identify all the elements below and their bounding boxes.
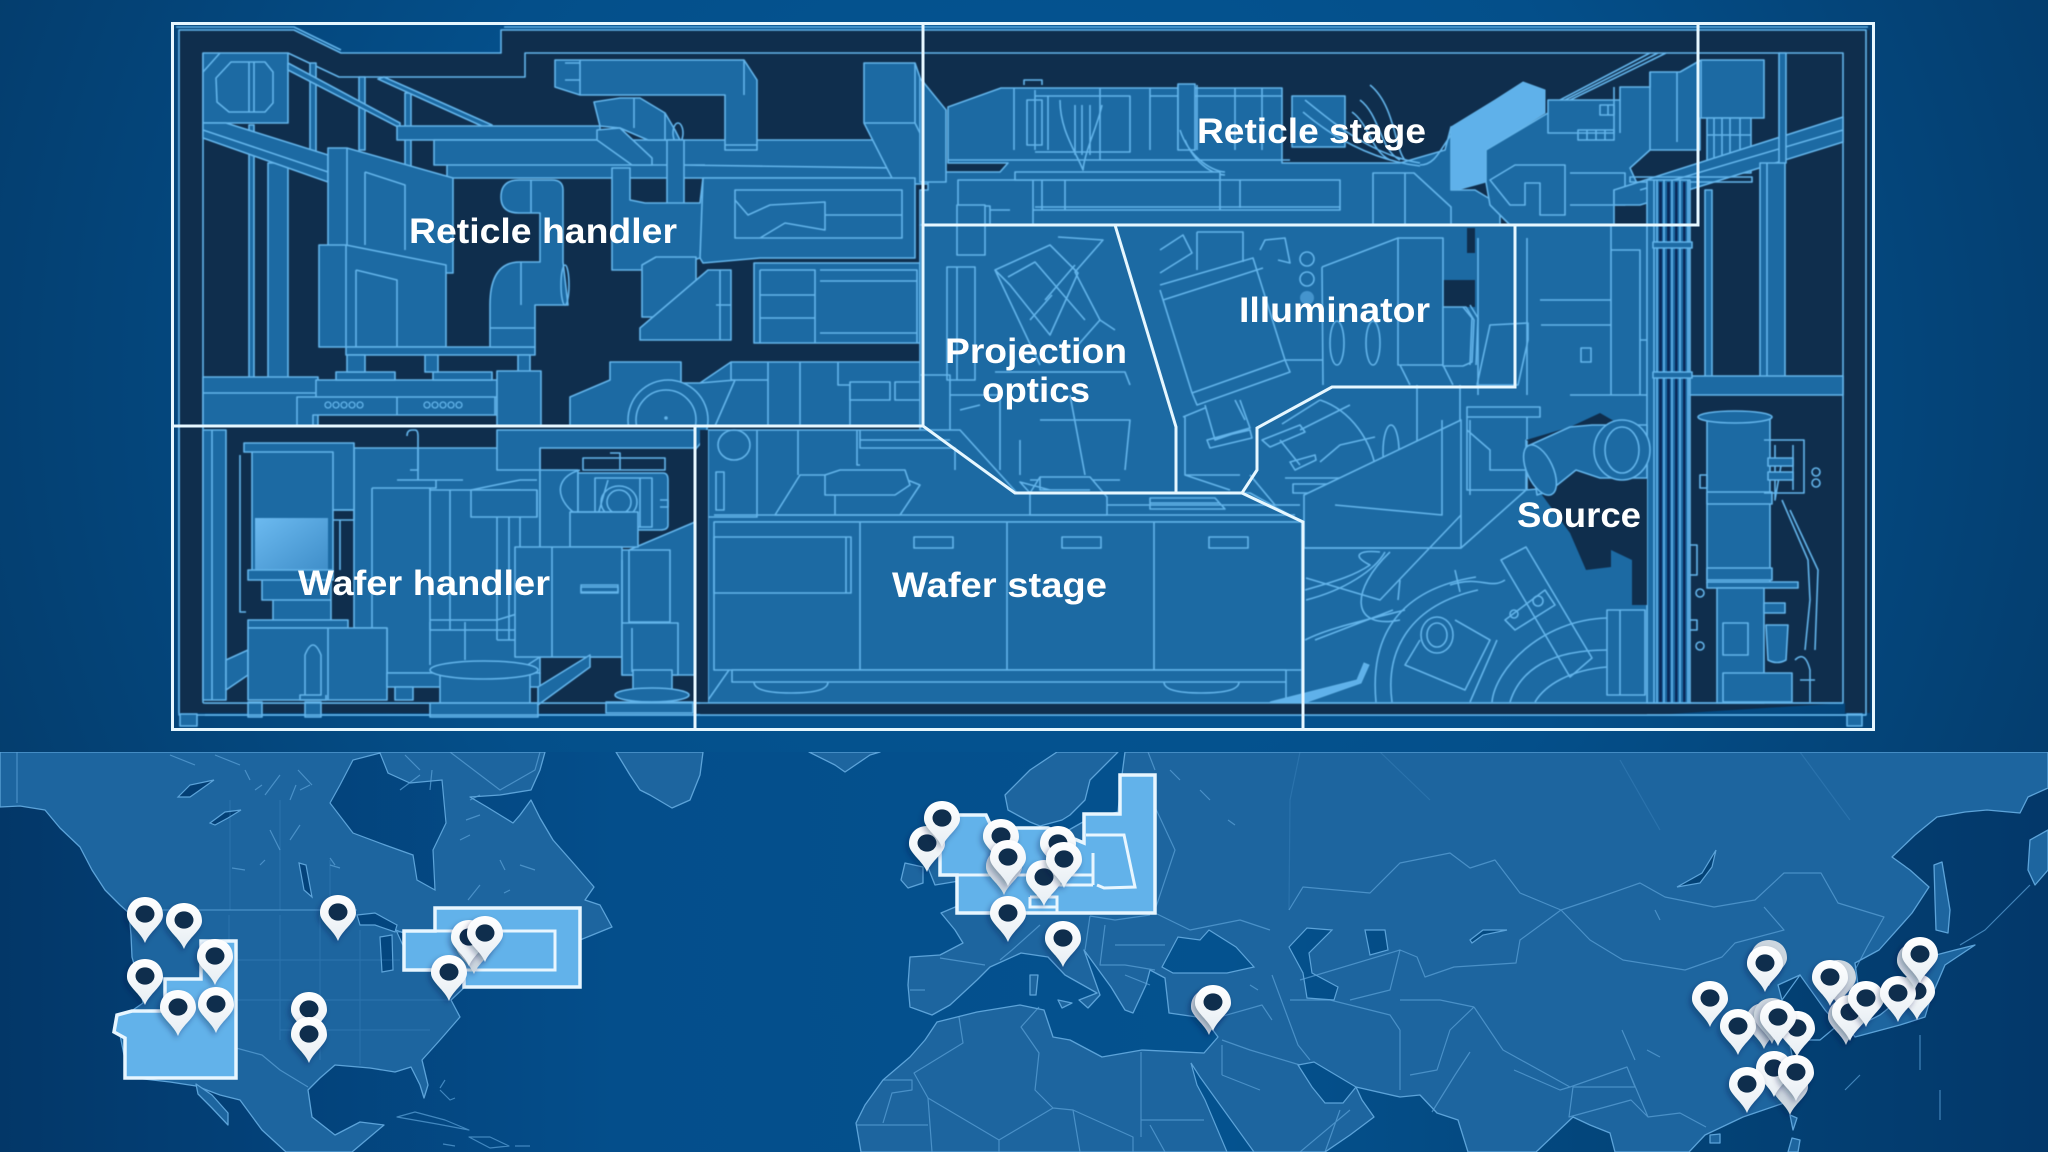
source vessel arcs [1375,577,1607,702]
pin [1751,940,1787,986]
lower stage slab [958,180,1340,225]
Caribbean islands [397,1080,530,1148]
pin [1754,998,1790,1044]
land: Greenland and Iceland [616,752,880,808]
light-blue reticle arm [1451,82,1545,190]
pin [198,987,234,1033]
label: Illuminator: Illuminator [1239,291,1430,330]
pin [160,990,196,1036]
US and Canada borders [17,752,440,1087]
pin [197,939,233,985]
posts and struts [268,163,288,378]
camera canister [642,257,696,317]
pins: Europe and Middle East [909,801,1231,1035]
elbow and flange [1530,425,1647,495]
highlight: western United States [114,941,236,1078]
pin [1772,1069,1808,1115]
panel: machine cutaway diagram [176,27,1870,726]
label: Projection optics: optics [982,371,1090,410]
pin [1191,989,1227,1035]
valves [1764,440,1818,650]
pins: North America [127,895,503,1063]
central module block [612,168,915,270]
base cabinet and wheels [248,628,387,700]
pin [1195,985,1231,1031]
main slab and beam [397,126,600,140]
pin [1026,860,1062,906]
module outlines in white [172,22,1874,730]
pin [1747,946,1783,992]
pin [1899,974,1935,1020]
module art: reticle stage [920,53,1843,228]
upper-left service box [203,53,288,123]
pin [451,920,487,966]
pin [166,903,202,949]
pin [1045,921,1081,967]
cylinder base [387,673,540,687]
module art: wafer stage [700,430,1647,715]
ventilation holes [325,402,462,408]
land: North America [0,752,612,1152]
illuminator linework [1160,232,1290,273]
drawer unit [754,263,920,343]
label: Wafer stage: Wafer stage [892,566,1107,605]
dark gap [1526,413,1647,605]
pin [1902,937,1938,983]
floor lines [205,703,1866,715]
pin [1778,1055,1814,1101]
right slanted column [864,63,945,184]
pin [1046,842,1082,888]
pin [127,897,163,943]
inland seas [1162,930,1254,973]
pin [431,955,467,1001]
light-blue swoosh [1270,663,1369,702]
pin [1812,960,1848,1006]
module art: vertical wiring, supports and roof [1647,53,1843,703]
left tall panels [328,148,453,273]
bars at right [1707,118,1751,173]
light-blue wafer window [255,518,328,570]
inner columns [372,488,530,665]
cabinet [714,522,1302,670]
camera module [578,473,668,530]
pin [452,944,492,977]
Great Lakes [356,912,402,973]
lower pedestal [570,362,925,426]
module art: reticle handler [203,53,945,460]
pin [1848,981,1884,1027]
curved wire bundle [1180,85,1420,175]
cables to the roof [1560,53,1666,100]
pin [1828,999,1864,1045]
pin [467,916,503,962]
centre cabinet [515,547,622,657]
gas tube [1707,417,1770,583]
pin [127,959,163,1005]
pin [1779,1011,1815,1057]
country borders [910,807,1270,990]
curved pipe [490,180,568,347]
pin [990,896,1026,942]
arctic islets [170,752,540,900]
pins: East Asia [1692,937,1938,1115]
label: Wafer handler: Wafer handler [298,564,550,603]
pin [1832,995,1868,1041]
pin [1729,1067,1765,1113]
Canadian lakes [178,780,312,897]
pin [291,1017,327,1063]
islands [1934,862,1950,933]
land: Europe, Africa and Asia [856,752,2048,1152]
stacked blocks [775,475,920,515]
pin [320,895,356,941]
pin [983,819,1019,865]
label: Source: Source [1517,496,1641,535]
pin [1746,1003,1782,1049]
optics body [948,85,1290,160]
base benches [203,377,318,426]
label: Projection optics: Projection [945,332,1127,371]
module art: projection optics and illuminator [920,205,1654,548]
pin [909,826,945,872]
pin [1820,960,1856,1006]
pin [986,849,1022,895]
small lakes and coastal dots [1148,752,2030,1120]
label: Reticle handler: Reticle handler [409,212,677,251]
tower [244,443,354,572]
highlight: Europe [940,775,1155,913]
pin [1720,1009,1756,1055]
pin [287,992,327,1025]
label: Reticle stage: Reticle stage [1197,112,1426,151]
pin [1756,1051,1792,1097]
pin [1880,976,1916,1022]
module art: source [1270,411,1862,726]
cooling pipes [1305,552,1505,640]
label: Projection optics [945,332,1127,410]
pin [1692,981,1728,1027]
highlight: northeastern United States [404,908,580,987]
pin [990,840,1026,886]
pin [1897,943,1933,989]
bottom rail [700,703,1647,715]
pin [1035,826,1077,860]
projection optics linework [947,267,975,380]
pin [1760,1000,1796,1046]
right cluster [1486,60,1764,225]
duct assembly [555,60,757,150]
machine dark enclosure [179,30,1870,715]
Hudson Bay [330,753,446,890]
module art: wafer handler [179,426,695,726]
panel: world map [0,752,2048,1152]
pin [924,801,960,847]
